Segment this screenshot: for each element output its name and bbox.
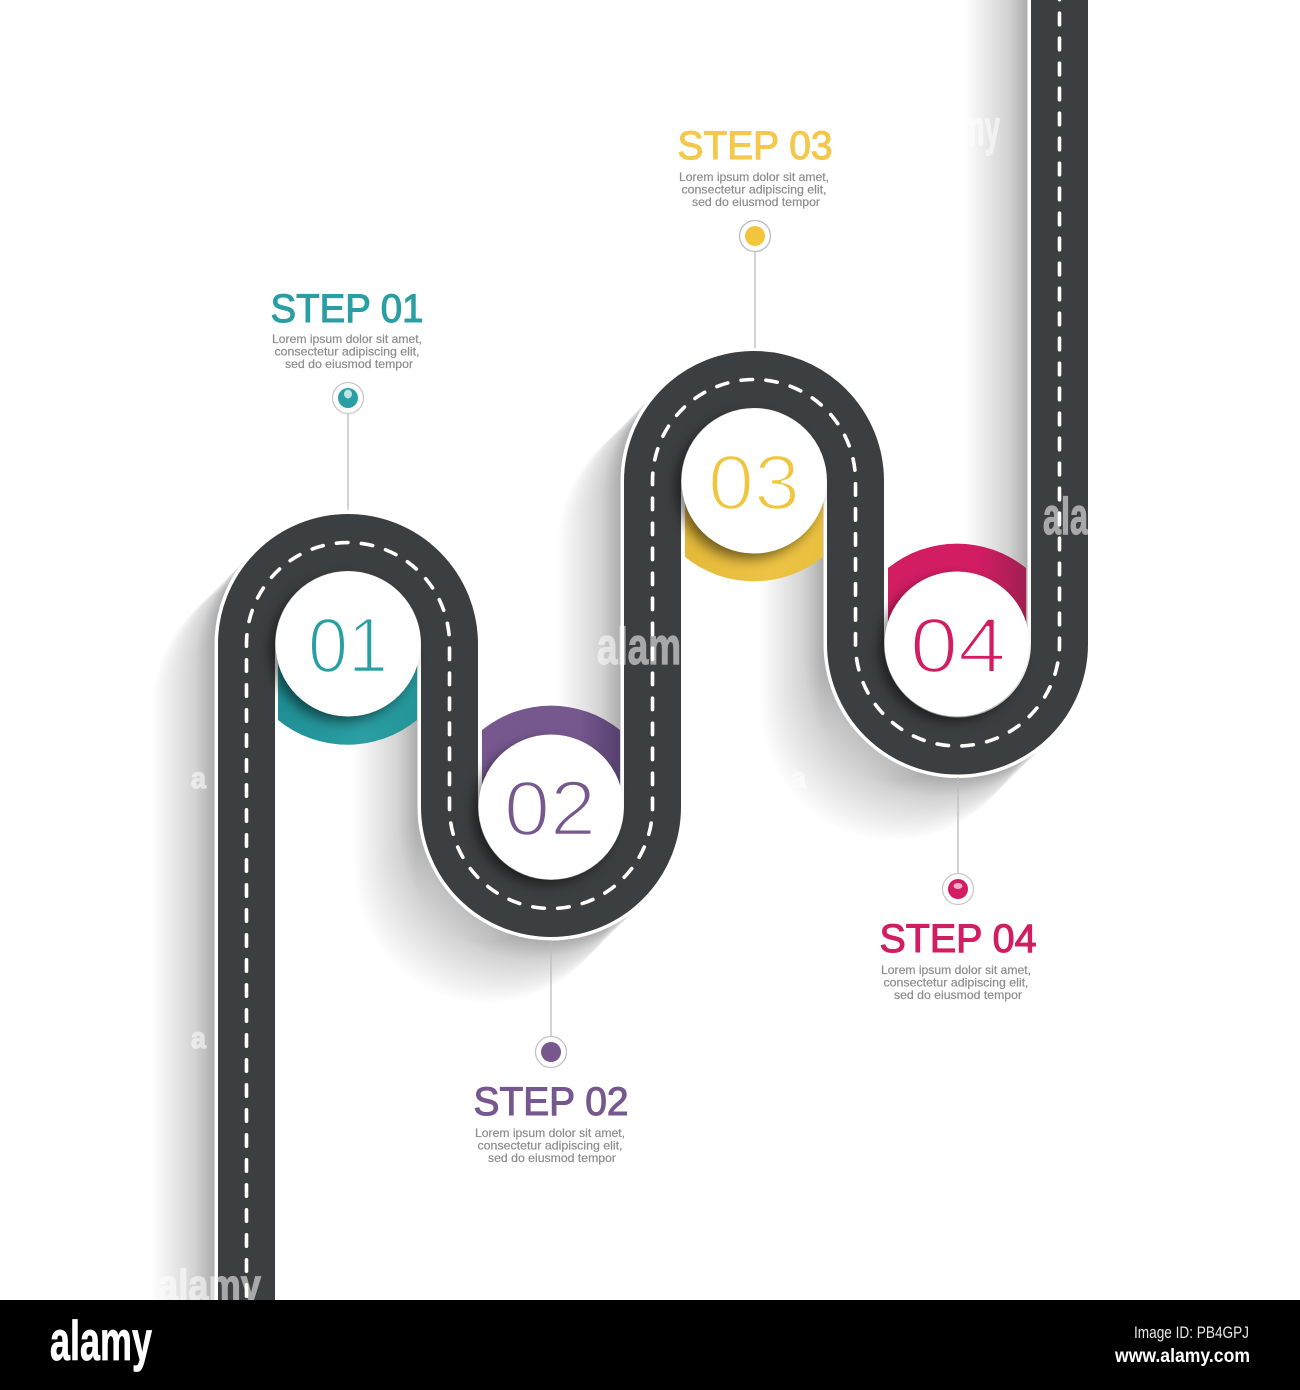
ribbon: step 04 pink xyxy=(888,544,1026,650)
marker: step 01 xyxy=(332,382,364,510)
label: step 04: STEP 04 xyxy=(880,917,1036,961)
footer image id and url: Image ID: PB4GPJ xyxy=(1134,1323,1249,1342)
footer logo: alamy xyxy=(50,1309,152,1372)
circle: step 02 xyxy=(478,734,624,880)
long road shadow xyxy=(182,0,1058,1364)
circle: step 04: 04 xyxy=(910,601,1006,689)
stock watermarks: a xyxy=(191,1022,206,1055)
circle shadows xyxy=(270,415,1023,885)
label: step 02: consectetur adipiscing elit, xyxy=(478,1138,622,1152)
label: step 03: sed do eiusmod tempor xyxy=(692,195,820,209)
stock watermarks: ala xyxy=(1043,488,1089,546)
label: step 04: consectetur adipiscing elit, xyxy=(884,976,1028,990)
label: step 02: STEP 02 xyxy=(474,1080,628,1124)
circle: step 02: 02 xyxy=(504,764,596,852)
footer bar xyxy=(0,1300,1300,1390)
marker: step 02 xyxy=(536,940,566,1068)
label: step 01: sed do eiusmod tempor xyxy=(285,357,413,371)
stock watermarks: a xyxy=(191,762,206,795)
footer image id and url xyxy=(1114,1323,1250,1367)
circle: step 01 xyxy=(276,572,420,716)
circle: step 03: 03 xyxy=(708,438,800,526)
stock watermarks: my xyxy=(960,100,1000,156)
stock watermarks: alam xyxy=(597,618,681,676)
ribbon: step 02 purple xyxy=(482,706,620,810)
label: step 01: consectetur adipiscing elit, xyxy=(274,344,420,358)
ribbon: step 03 yellow xyxy=(685,487,823,581)
stock watermarks xyxy=(158,100,1089,1310)
stock watermarks: a xyxy=(791,762,806,795)
label: step 03: Lorem ipsum dolor sit amet, xyxy=(679,170,829,184)
footer image id and url: www.alamy.com xyxy=(1114,1346,1250,1367)
label: step 01: STEP 01 xyxy=(270,287,424,331)
label: step 02: Lorem ipsum dolor sit amet, xyxy=(475,1126,625,1140)
marker: step 03 xyxy=(740,220,770,348)
marker: step 04 xyxy=(942,777,974,904)
ribbon: step 01 teal xyxy=(278,650,417,745)
stock watermarks: alamy xyxy=(158,1261,261,1310)
label: step 02 xyxy=(474,1080,628,1165)
label: step 01: Lorem ipsum dolor sit amet, xyxy=(272,332,422,346)
label: step 03 xyxy=(678,124,832,209)
label: step 03: consectetur adipiscing elit, xyxy=(682,182,826,196)
winding road xyxy=(246,0,1060,1300)
circle: step 04 xyxy=(884,572,1030,716)
circle: step 01: 01 xyxy=(308,601,388,689)
circle: step 03 xyxy=(682,408,826,554)
label: step 04: sed do eiusmod tempor xyxy=(894,988,1022,1002)
label: step 04 xyxy=(880,917,1036,1002)
label: step 04: Lorem ipsum dolor sit amet, xyxy=(881,963,1031,977)
label: step 03: STEP 03 xyxy=(678,124,832,168)
label: step 01 xyxy=(270,287,424,371)
label: step 02: sed do eiusmod tempor xyxy=(488,1151,616,1165)
